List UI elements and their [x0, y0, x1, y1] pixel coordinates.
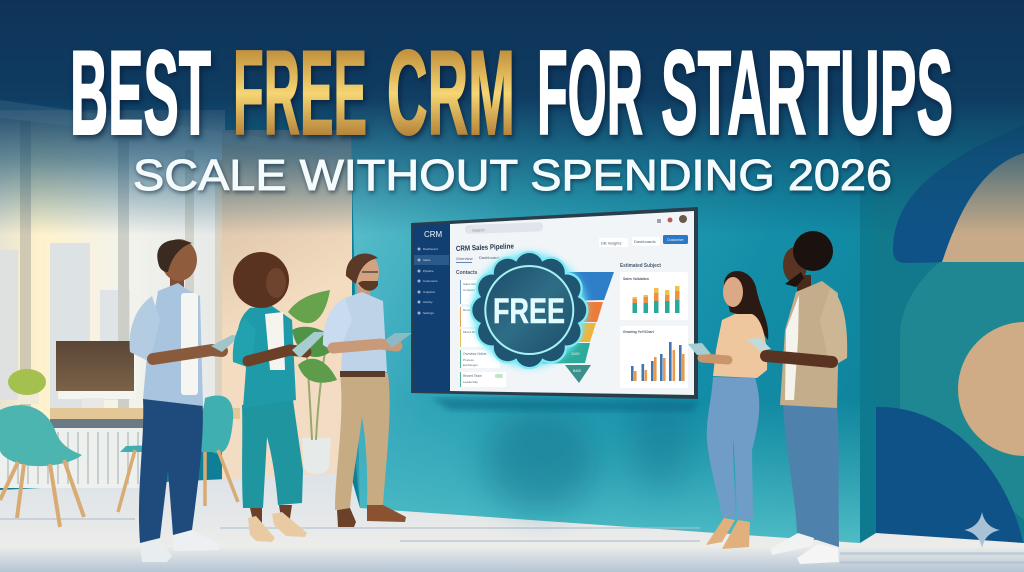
tee — [181, 293, 198, 395]
title words: FOR STARTUPS: FOR — [537, 26, 643, 160]
head — [353, 254, 379, 290]
top icons — [657, 215, 687, 223]
small desk plant — [8, 369, 46, 404]
hand — [702, 358, 728, 360]
neck — [797, 275, 811, 291]
contacts list: Contacts — [463, 288, 475, 292]
jeans — [783, 402, 839, 547]
upper arm — [820, 288, 847, 368]
screen background — [450, 211, 694, 395]
hair and beard — [346, 254, 378, 291]
person 1: man in blue shirt — [130, 239, 240, 562]
left office furniture — [0, 290, 338, 527]
glasses — [362, 271, 378, 273]
potted plant — [288, 290, 338, 474]
person 3: man with glasses — [323, 254, 412, 527]
panel heading: Estimated Subject — [620, 263, 661, 269]
filter buttons: Customize — [667, 238, 684, 242]
afro hair — [233, 252, 289, 308]
upper arm — [233, 318, 256, 368]
dashboard heading: CRM Sales Pipeline — [456, 241, 514, 253]
filter buttons: Dashboards — [634, 239, 656, 244]
monitor frame — [411, 207, 698, 399]
ankles and heels — [706, 518, 735, 545]
sidebar — [413, 224, 450, 391]
shirt — [341, 292, 387, 372]
dashboard tabs: Dashboard — [479, 255, 499, 260]
blazer — [238, 306, 296, 408]
title words: FREE CRM: FREE — [233, 26, 367, 160]
filter buttons: DB Insights — [601, 240, 621, 246]
shoes — [337, 508, 356, 527]
desk — [50, 408, 240, 419]
person 5: man in khaki jacket — [746, 231, 847, 564]
top dark gradient — [0, 0, 1024, 235]
sparkle watermark — [964, 512, 1000, 548]
ankles — [250, 505, 292, 525]
tablet — [292, 332, 326, 358]
stacked bar chart panel — [620, 272, 688, 320]
beige wall — [222, 130, 352, 500]
tablet — [211, 335, 240, 352]
forearm — [333, 344, 397, 348]
hair — [724, 271, 768, 340]
badge glow — [472, 253, 586, 367]
contacts list: Leadership — [463, 380, 478, 384]
hair — [157, 240, 192, 272]
lower wall lightening — [350, 400, 860, 543]
floor — [0, 473, 1024, 572]
hair — [793, 231, 833, 271]
monitor: CRM dashboard on wall — [411, 207, 698, 399]
head — [161, 239, 197, 281]
filter buttons — [599, 235, 688, 247]
back chair — [118, 396, 238, 512]
sidebar menu: Settings — [423, 311, 434, 315]
window wall — [0, 110, 225, 440]
teal wall — [350, 90, 860, 543]
beard — [785, 272, 804, 287]
mural navy wave — [876, 407, 1024, 546]
neck — [357, 283, 370, 295]
dashboard tabs: Overview — [456, 256, 473, 261]
main title: CRM — [387, 26, 515, 160]
window sill — [50, 419, 145, 428]
tablet — [688, 343, 711, 355]
ceiling line — [0, 100, 350, 158]
person 4: woman in peach blouse — [688, 271, 768, 549]
blouse — [713, 314, 767, 378]
contacts list: Overview Online — [463, 352, 487, 356]
heels — [248, 516, 275, 542]
contacts list: Process — [463, 358, 474, 362]
tablet — [746, 338, 771, 351]
radiator — [0, 428, 146, 488]
contacts list: Recent — [463, 308, 473, 312]
sneakers — [770, 533, 814, 555]
belt — [340, 371, 385, 377]
tee — [785, 295, 799, 400]
wall side panel — [860, 90, 876, 543]
jeans — [707, 377, 759, 520]
search bar: Search — [472, 227, 485, 233]
jeans — [139, 396, 203, 543]
tablet — [385, 333, 412, 348]
grouped bar chart panel — [620, 326, 688, 388]
main title — [70, 26, 953, 160]
subtitle: SCALE WITHOUT SPENDING 2026 — [133, 151, 892, 200]
forearm — [248, 350, 306, 361]
sidebar menu: Activity — [423, 300, 433, 304]
badge label: FREE — [493, 292, 565, 331]
stacked bar chart panel: Sales Validation — [623, 277, 649, 281]
contacts list: Recent Team — [463, 374, 482, 378]
badge body — [472, 253, 586, 367]
sidebar menu: Sales — [423, 258, 431, 262]
contacts list: Exchanges — [463, 363, 478, 367]
desktop monitor — [56, 341, 136, 408]
main title: BEST — [70, 26, 211, 160]
sidebar menu: Analytics — [423, 290, 436, 294]
sidebar menu: Pipeline — [423, 269, 434, 273]
title words: FOR STARTUPS — [537, 26, 953, 160]
badge inner ring — [485, 266, 573, 354]
white top — [265, 312, 285, 370]
floor light stripes — [0, 518, 1024, 564]
grouped bar chart panel: Growing YoY/Chart — [623, 330, 655, 334]
mural navy blob — [893, 125, 1024, 263]
sales funnel chart: $400 — [573, 369, 581, 373]
face — [723, 277, 743, 307]
forearm — [766, 356, 832, 362]
mural beige top — [942, 153, 1024, 262]
trousers — [242, 400, 303, 508]
abstract wall mural — [876, 90, 1024, 546]
head — [783, 247, 807, 283]
FREE badge — [471, 252, 587, 368]
mural teal shape — [900, 262, 1024, 520]
sneakers — [140, 540, 172, 562]
upper arm — [130, 296, 160, 362]
front chair — [0, 405, 84, 527]
mural beige circle — [958, 322, 1024, 456]
wall shadows — [432, 390, 700, 510]
sales funnel chart — [520, 272, 614, 383]
contacts list: Sales Record — [463, 282, 481, 286]
khaki trousers — [335, 373, 390, 510]
shirt — [143, 283, 203, 406]
upper arm — [323, 298, 352, 354]
face — [266, 268, 286, 298]
sidebar menu — [414, 247, 449, 315]
neck — [170, 272, 184, 288]
contacts list: Contacts — [456, 270, 478, 276]
search bar — [465, 222, 543, 234]
person 2: woman in teal suit — [233, 252, 326, 542]
contacts list — [456, 270, 506, 387]
sidebar logo: CRM — [424, 230, 443, 239]
forearm — [153, 350, 222, 359]
badge scalloped edge — [471, 252, 587, 368]
forearm sleeve — [730, 362, 758, 368]
sales funnel chart: 1100 — [571, 351, 580, 356]
contacts list: Mixed Deals — [463, 330, 480, 334]
sidebar menu: Dashboard — [423, 247, 438, 251]
jacket — [780, 281, 838, 408]
dashboard tabs — [456, 255, 499, 263]
sidebar menu: Customers — [423, 279, 438, 283]
